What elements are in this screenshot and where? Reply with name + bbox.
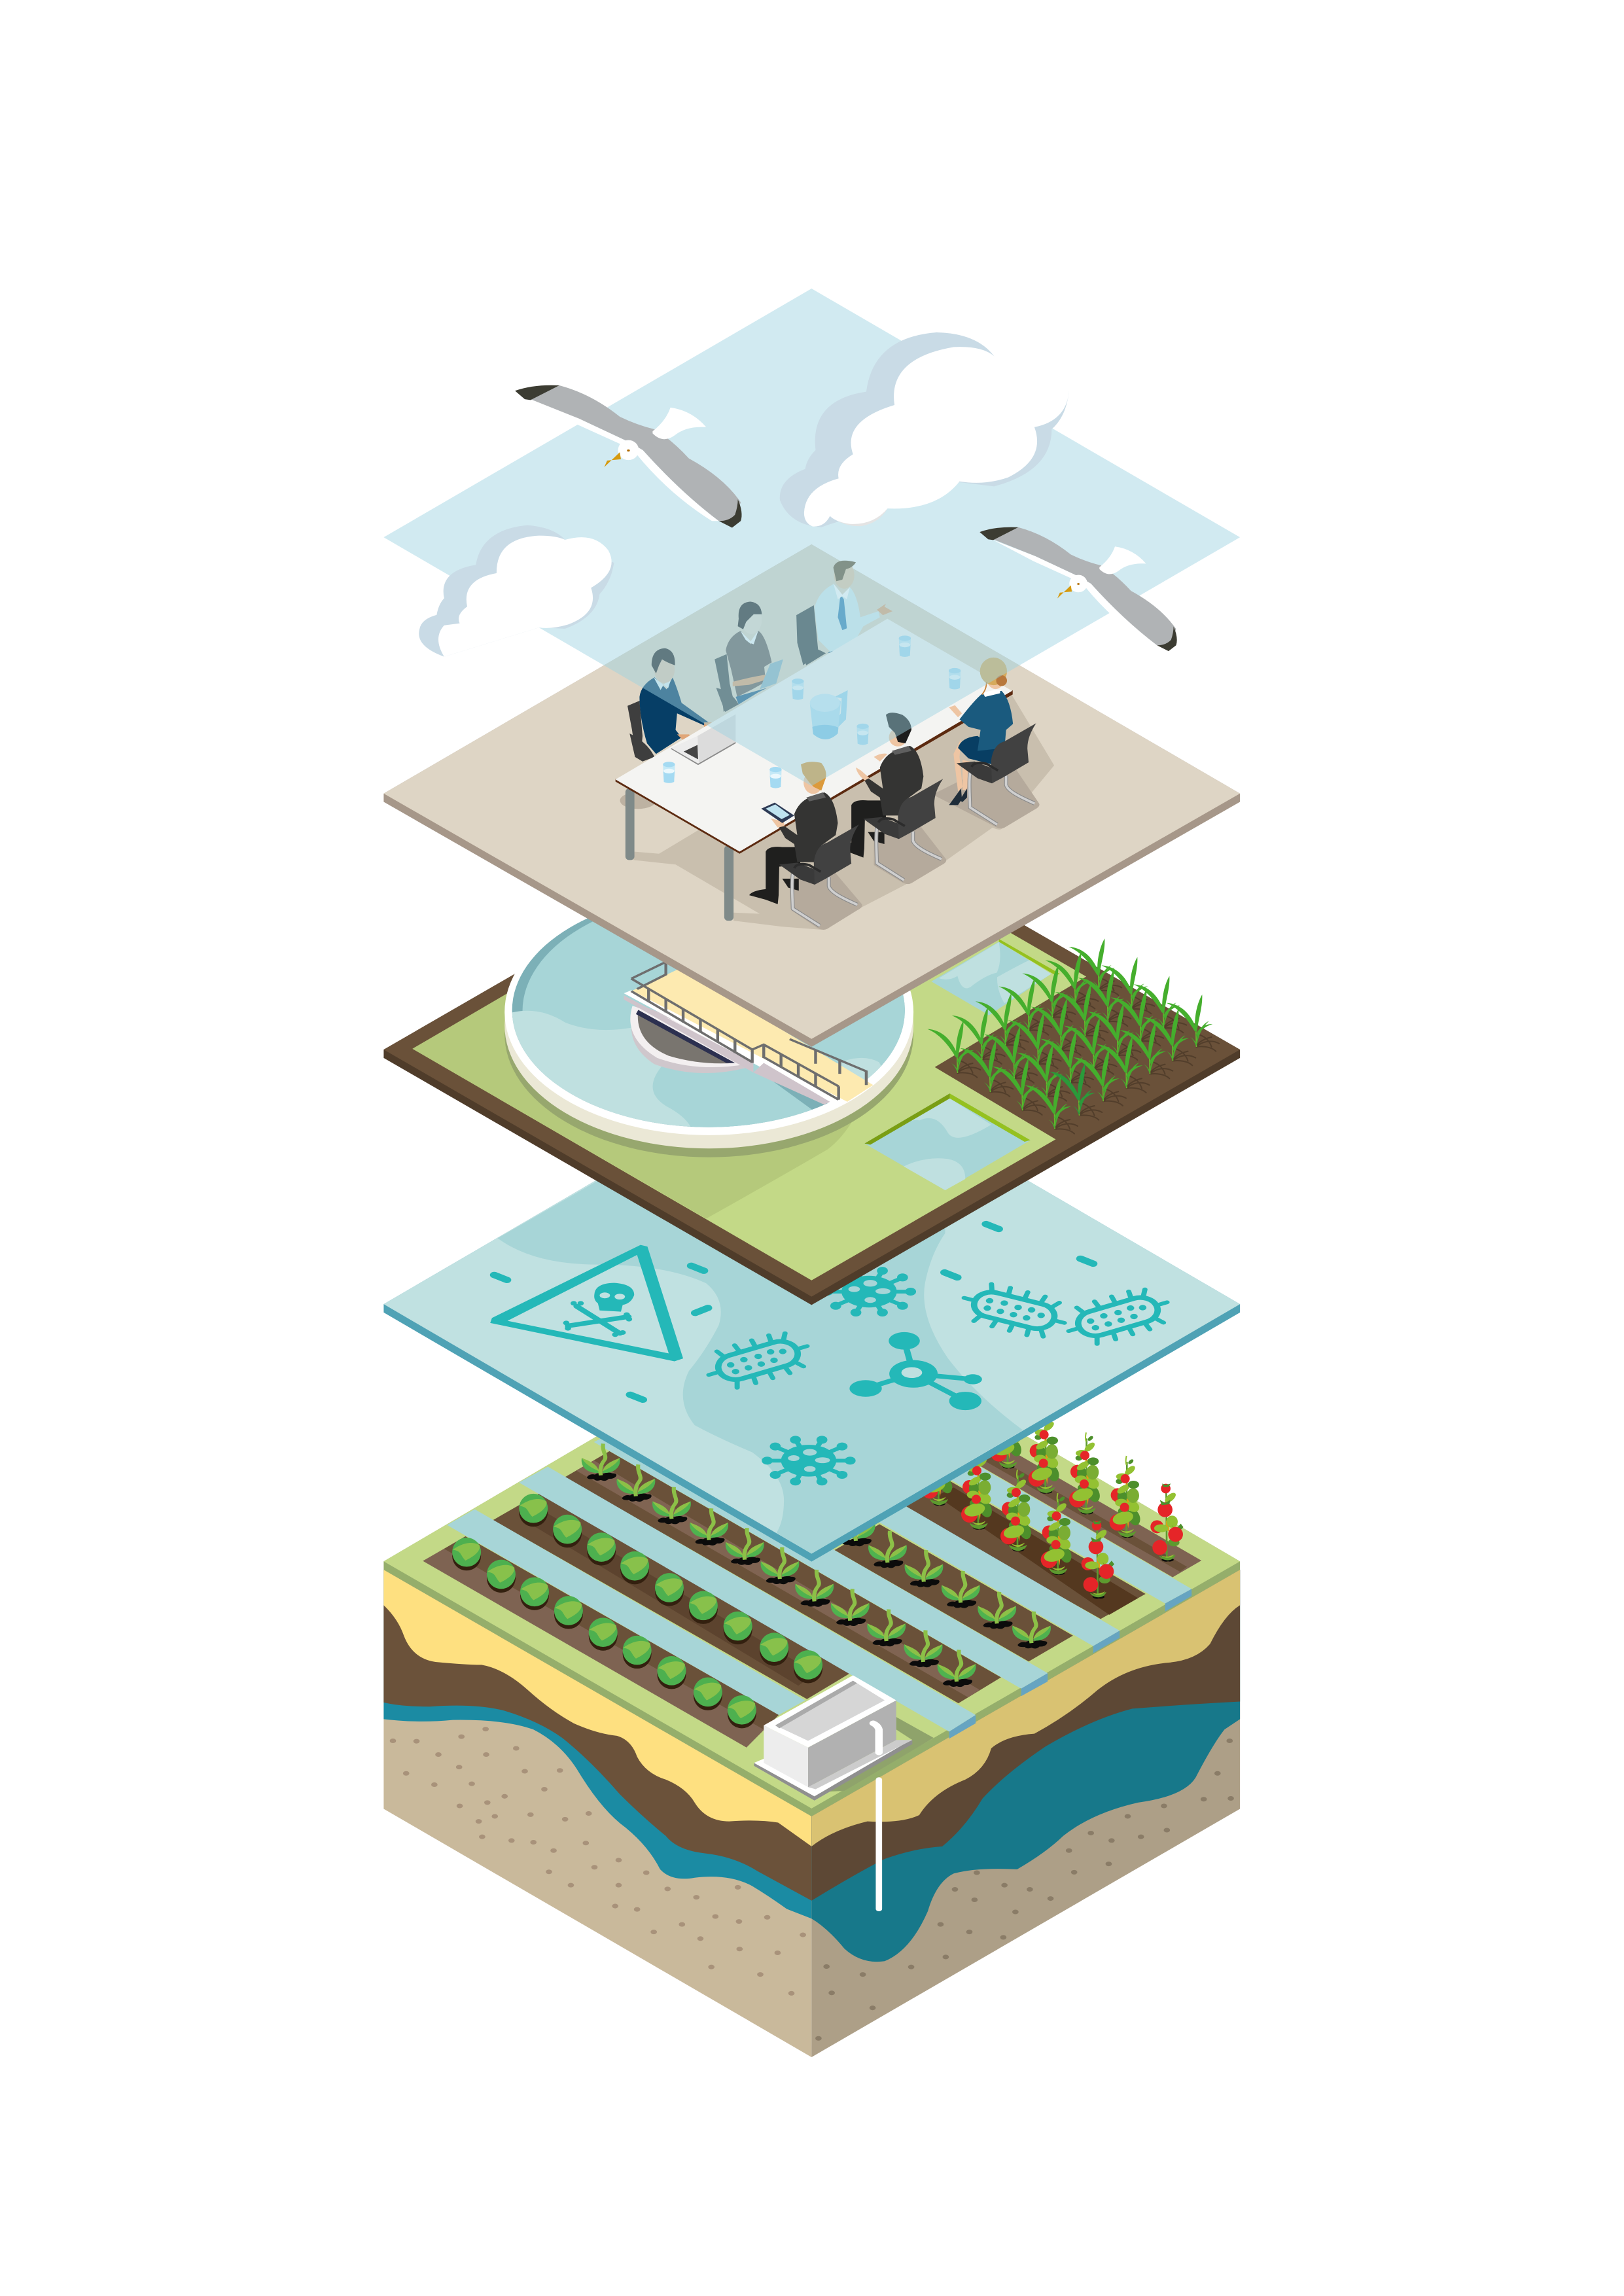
water glasses and pitcher (663, 635, 961, 788)
upper settling pond and cornfield (927, 938, 1219, 1134)
lower settling pond (864, 1093, 1031, 1190)
irrigation channels (447, 1428, 1192, 1739)
person: woman in blue suit (949, 658, 1013, 805)
grass surface (412, 818, 1086, 1280)
walkway bridge (624, 962, 873, 1104)
person: far left, navy sweater (627, 648, 718, 762)
field surface (383, 1310, 1240, 1816)
corn plants (927, 938, 1212, 1129)
pollutant dashes (494, 1224, 1093, 1400)
laptop (671, 715, 735, 765)
cabbage rows (452, 1494, 822, 1728)
person: far middle, grey sweater (715, 601, 783, 712)
layer: wastewater treatment plant (383, 919, 1241, 1305)
virus icons (768, 1271, 911, 1481)
water plane (383, 1055, 1240, 1562)
cloud: small (419, 525, 614, 657)
circular clarifier tank (504, 919, 913, 1157)
chair behind woman (957, 723, 1036, 824)
cloud: large (780, 332, 1069, 527)
bird: right gull (980, 527, 1177, 651)
warning triangle with skull and crossbones (490, 1245, 683, 1362)
molecule icon (849, 1332, 982, 1410)
layer: farmland and groundwater block (383, 1310, 1240, 2057)
crop beds (423, 1428, 1201, 1748)
meeting scene (616, 561, 1054, 930)
soil strata: right face (811, 1570, 1240, 2057)
person: man in dark suit, centre (835, 713, 923, 858)
bacteria icons (698, 1279, 1178, 1394)
chair behind front man (779, 824, 859, 926)
person: far right, white shirt and tie (796, 561, 892, 665)
tomato plants (921, 1386, 1184, 1598)
soil strata: left face (383, 1570, 811, 2057)
layer: meeting room floor (383, 544, 1240, 1047)
layer: sky plane (383, 289, 1240, 786)
soil base slab (383, 803, 1240, 1305)
layer: water pollution (383, 1055, 1240, 1562)
meeting table (616, 619, 1013, 921)
chair behind centre man (864, 779, 943, 880)
person: man in dark suit with tablet (749, 762, 838, 904)
bird: upper left gull (515, 385, 742, 528)
upper pond (931, 939, 1060, 1016)
central clarifier well (630, 1004, 752, 1073)
floor shadows (620, 696, 1054, 930)
cornfield soil shadows (957, 978, 1219, 1134)
pump building and well pipe (754, 1675, 934, 1909)
infographic: stacked isometric layers (383, 289, 1241, 2057)
seedling rows (582, 1443, 1051, 1687)
